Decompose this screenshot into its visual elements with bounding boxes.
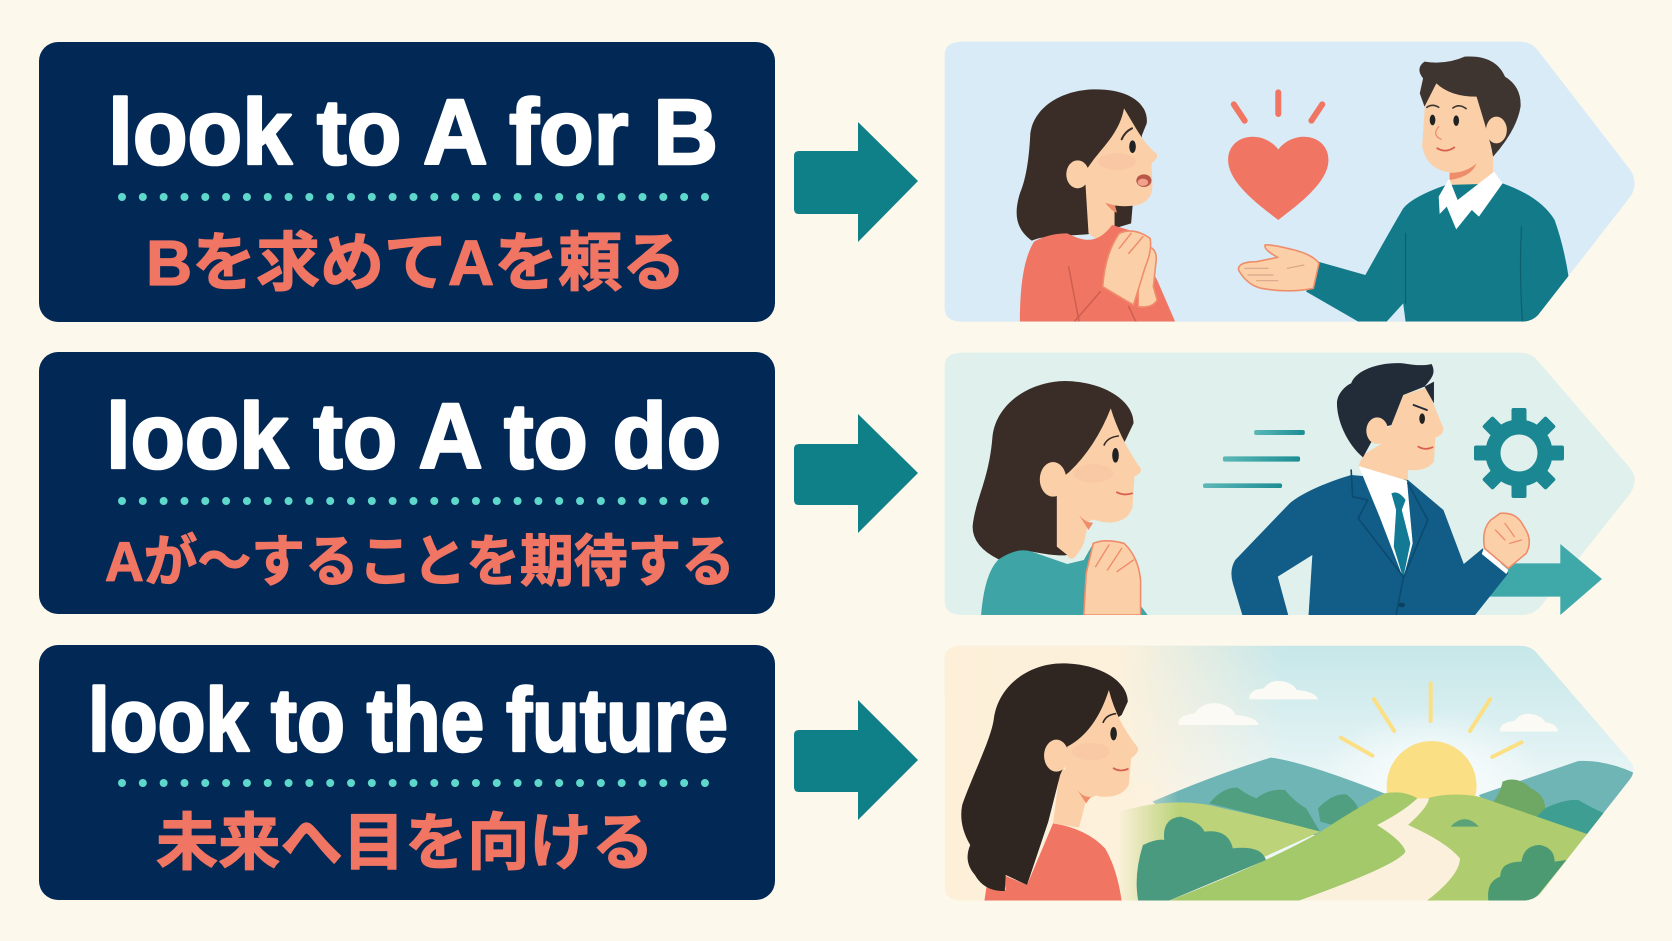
heading: look to A to do: look to A to do xyxy=(106,384,721,488)
heading: look to the future: look to the future xyxy=(88,671,728,771)
panel: look to A to do xyxy=(39,352,775,614)
man offering hand xyxy=(1238,56,1569,322)
panel: illustration expectation xyxy=(945,353,1635,615)
icon: gear xyxy=(1474,408,1564,498)
heading: look to A for B: look to A for B xyxy=(108,80,718,184)
trees xyxy=(1209,779,1604,837)
arrow 1 xyxy=(794,122,918,242)
woman praying xyxy=(1017,89,1175,322)
arrow forward xyxy=(1488,544,1602,615)
icon: heart with rays xyxy=(1228,92,1328,220)
arrow 2 xyxy=(794,414,918,533)
panel: illustration heart request xyxy=(945,42,1635,322)
meaning: Japanese translation: Aが〜することを期待する xyxy=(105,530,735,593)
woman hoping xyxy=(973,381,1148,615)
clouds xyxy=(1178,681,1558,732)
mountains xyxy=(1152,758,1635,838)
woman looking ahead xyxy=(961,663,1138,901)
man in suit xyxy=(1231,363,1529,615)
meaning: Japanese translation: Bを求めてAを頼る xyxy=(146,227,686,299)
hills and road xyxy=(1119,792,1590,901)
foreground bushes xyxy=(1137,817,1566,901)
sun xyxy=(1338,681,1524,824)
speed lines xyxy=(1203,430,1305,488)
meaning: Japanese translation: 未来へ目を向ける xyxy=(156,809,654,878)
arrow 3 xyxy=(794,700,918,820)
panel: illustration future landscape xyxy=(945,646,1640,901)
panel: look to A for B xyxy=(39,42,775,322)
panel: look to the future xyxy=(39,645,775,900)
